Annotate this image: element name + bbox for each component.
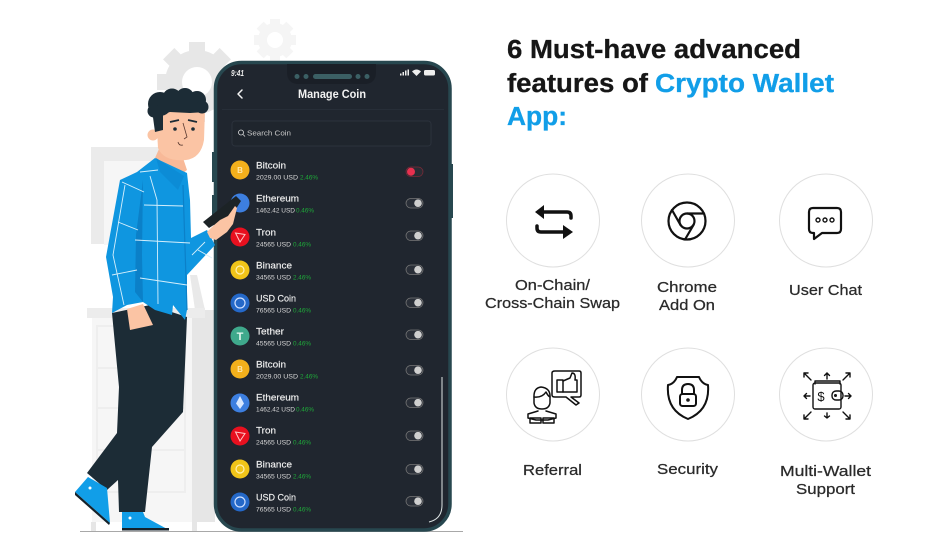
icon: swap arrows <box>535 205 573 239</box>
feature: On-Chain/Cross-Chain Swap: Cross-Chain Swap <box>485 295 620 312</box>
feature circle <box>780 348 872 441</box>
left shoe <box>75 477 110 525</box>
label: On-Chain/ <box>515 277 591 294</box>
icon: chat bubble <box>809 208 841 239</box>
icon: shield with padlock <box>668 377 708 419</box>
coin row: Bitcoin: Bitcoin <box>256 160 286 172</box>
coin row: Tron second <box>230 426 423 446</box>
feature: Security <box>642 348 734 478</box>
coin row: USD Coin second: USD Coin <box>256 492 296 504</box>
coin row: Tether: 0.46% <box>293 340 311 348</box>
search box <box>232 121 431 146</box>
coin row: USD Coin: 0.46% <box>293 308 311 314</box>
label: Referral <box>523 462 582 479</box>
right shoe <box>122 512 169 530</box>
back arrow <box>238 90 242 98</box>
feature: User Chat <box>780 174 872 299</box>
coin row: Binance: 2.46% <box>293 274 311 282</box>
status bar: signal, wifi, battery <box>400 70 435 76</box>
person holding phone <box>75 88 241 530</box>
heading: features of <box>507 70 649 98</box>
heading: Crypto Wallet <box>655 70 835 98</box>
screen title: Manage Coin <box>298 89 366 101</box>
picture frame <box>91 147 184 245</box>
coin row: Binance second <box>230 460 423 480</box>
coin row: Bitcoin second: B <box>237 365 243 374</box>
icon: person with thumbs-up speech bubble <box>528 371 581 423</box>
coin row: Bitcoin <box>230 160 423 182</box>
coin row: Tether <box>230 326 423 348</box>
coin row: Bitcoin second: 2029.00 USD <box>256 374 298 380</box>
coin row: Bitcoin: 2.46% <box>300 174 318 182</box>
notch <box>287 64 376 84</box>
ground line <box>80 531 463 532</box>
hair <box>148 88 208 132</box>
coin row: Binance second: Binance <box>256 460 292 470</box>
feature: Referral <box>506 348 600 479</box>
coin row: Ethereum second: Ethereum <box>256 392 299 404</box>
coin row: USD Coin second <box>230 492 423 514</box>
coin row: Ethereum: 1462.42 USD <box>256 208 295 214</box>
icon: wallet with arrows: $ <box>817 389 825 404</box>
label: Security <box>657 461 719 478</box>
icon: chrome logo <box>668 202 706 240</box>
header divider <box>222 109 444 110</box>
coin row: Tron second: 24565 USD <box>256 440 291 446</box>
search box: Search Coin <box>247 128 291 138</box>
feature: On-Chain/Cross-Chain Swap <box>485 174 620 312</box>
cabinet <box>87 275 215 531</box>
feature: Chrome Add On: Add On <box>659 297 715 314</box>
coin row: Bitcoin: B <box>237 166 243 175</box>
held phone <box>203 196 241 228</box>
feature circle <box>780 174 872 267</box>
coin row: USD Coin: USD Coin <box>256 294 296 304</box>
phone <box>212 62 453 530</box>
coin row: Bitcoin: 2029.00 USD <box>256 174 298 182</box>
coin row: Ethereum second: 0.46% <box>296 406 314 414</box>
coin row: Bitcoin second: Bitcoin <box>256 360 286 370</box>
feature: Multi-Wallet Support <box>780 348 872 498</box>
coin row: Binance <box>230 260 423 282</box>
coin row: USD Coin second: 76565 USD <box>256 506 291 514</box>
feature circle <box>506 174 600 267</box>
coin row: Tron: Tron <box>256 228 276 238</box>
coin row: Binance second: 34565 USD <box>256 474 291 480</box>
coin row: Ethereum <box>230 194 423 214</box>
coin row: Ethereum second: 1462.42 USD <box>256 406 295 414</box>
feature circle <box>642 348 734 441</box>
label: Chrome <box>657 279 717 296</box>
heading: App: <box>507 103 567 131</box>
coin row: Tether: 45565 USD <box>256 340 291 348</box>
coin row: Ethereum: 0.46% <box>296 208 314 214</box>
icon: wallet with arrows <box>804 373 851 419</box>
coin row: Bitcoin second <box>230 360 423 380</box>
coin row: Tether: Tether <box>256 326 284 338</box>
status bar: time: 9:41 <box>231 69 244 78</box>
feature: Multi-Wallet Support: Support <box>796 481 856 498</box>
holding hand <box>207 206 237 240</box>
coin row: Tron second: 0.46% <box>293 440 311 446</box>
gear: large grey <box>157 42 237 122</box>
heading <box>507 36 835 131</box>
coin row: Ethereum second <box>230 392 423 414</box>
background illustration: gears, frame and cabinet <box>80 19 463 532</box>
feature circle <box>642 174 734 267</box>
heading: 6 Must-have advanced <box>507 36 801 64</box>
coin row: Binance: 34565 USD <box>256 274 291 282</box>
coin row: Bitcoin second: 2.46% <box>300 374 318 380</box>
side buttons <box>212 152 453 225</box>
coin row: Tether: T <box>237 331 244 343</box>
feature circle <box>506 348 600 441</box>
neck and face <box>148 108 205 177</box>
shirt <box>106 158 215 320</box>
coin row: Binance second: 2.46% <box>293 474 311 480</box>
hand in pocket <box>127 304 153 330</box>
coin row: Ethereum: Ethereum <box>256 194 299 204</box>
trousers <box>87 305 187 512</box>
coin row: USD Coin second: 0.46% <box>293 506 311 514</box>
label: Multi-Wallet <box>780 463 872 480</box>
screen edge highlight <box>429 377 442 522</box>
coin row: Binance: Binance <box>256 260 292 272</box>
coin row: USD Coin: 76565 USD <box>256 308 291 314</box>
coin row: Tron: 0.46% <box>293 242 311 248</box>
coin row: Tron second: Tron <box>256 426 276 436</box>
phone body <box>216 62 450 530</box>
coin row: Tron: 24565 USD <box>256 242 291 248</box>
gear: small pale <box>254 19 296 61</box>
feature: Chrome Add On <box>642 174 734 314</box>
label: User Chat <box>789 282 863 299</box>
coin row: USD Coin <box>230 294 423 314</box>
coin row: Tron <box>230 228 423 248</box>
